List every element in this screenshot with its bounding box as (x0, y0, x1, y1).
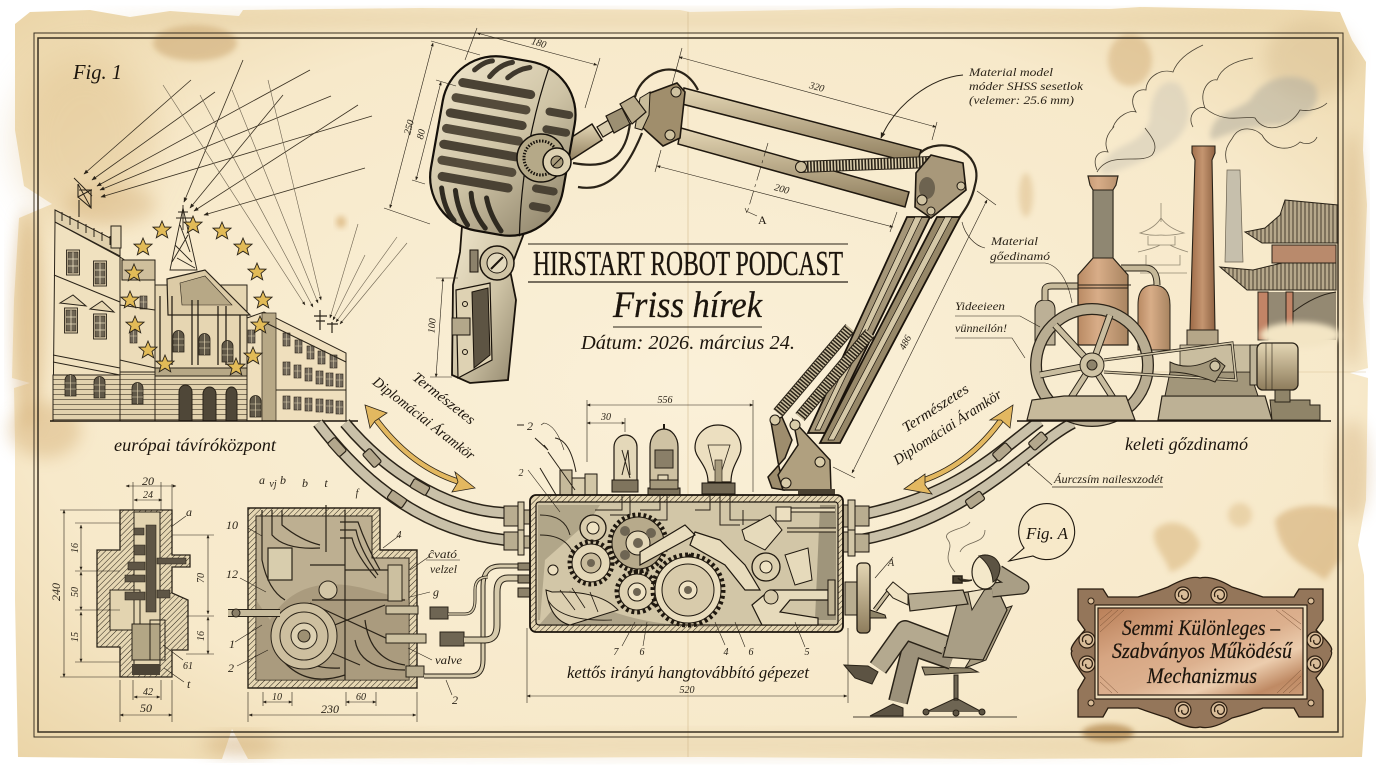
cutaway labels: 2 (228, 661, 234, 675)
dimensions: microphone and arm: 320 (807, 80, 825, 95)
connecting rods (1104, 343, 1236, 382)
dimensions: microphone and arm: 180 (530, 36, 547, 51)
cross-section drawing: left (49, 474, 214, 722)
smoke outlines (1095, 45, 1327, 172)
section labels (49, 474, 207, 715)
right gear and escapement (742, 507, 836, 585)
smoke masses (1100, 77, 1317, 175)
housing interior (536, 502, 838, 625)
title rule top (528, 243, 848, 245)
dimensions: microphone and arm: 250 (402, 119, 417, 136)
title rule bottom (528, 281, 848, 283)
gearbox dimensions and labels: 2 (518, 468, 524, 479)
right antennas (314, 310, 338, 333)
piston linkage (752, 580, 835, 625)
second bay (120, 257, 155, 421)
plate corner engraving (1100, 610, 1301, 693)
head (972, 555, 1000, 589)
caption: eastern dynamo: keleti gőzdinamó (1125, 434, 1248, 454)
annotation: left engine notes: Yideeieen (955, 299, 1005, 313)
flywheel bed (1027, 396, 1135, 420)
annotation: material dynamo: gőedinamó (990, 249, 1050, 263)
gearbox dimensions and labels (517, 395, 848, 703)
handwheel and lever: A (887, 558, 895, 569)
mic joint cylinder (558, 96, 646, 162)
section labels: t (187, 677, 191, 691)
engine bed (1158, 345, 1320, 420)
mic pivot knuckle (517, 134, 571, 182)
electric motor (1250, 343, 1298, 402)
small left tank (1035, 286, 1080, 345)
cam lever (640, 525, 760, 590)
tall chimney (1187, 146, 1218, 350)
cutaway labels: f (356, 488, 360, 499)
robot arm (558, 70, 976, 496)
dimensions: microphone and arm: 100 (426, 318, 439, 334)
cutaway labels: b (302, 476, 308, 490)
block shell (248, 508, 417, 688)
pipe (953, 576, 972, 583)
block interior (256, 516, 409, 680)
lower arm springs (778, 328, 870, 417)
cutaway drawing: valve block (226, 473, 518, 722)
cutaway labels: 12 (226, 567, 238, 581)
section labels: 240 (49, 583, 63, 601)
gold double arrow: right (904, 405, 1013, 494)
gear: large (653, 555, 723, 625)
section labels: 50 (70, 587, 81, 597)
dimensions: microphone and arm: 200 (773, 182, 790, 197)
european stars (121, 216, 272, 375)
gearbox mechanism (530, 424, 843, 632)
signal beams converging on antennas (84, 60, 407, 324)
temple (1220, 200, 1340, 348)
left antenna (74, 178, 92, 217)
subtitle rule (613, 326, 762, 328)
section body (97, 510, 190, 677)
dimensions: microphone and arm: 486 (897, 334, 914, 352)
copper plate (1098, 608, 1303, 695)
cutaway labels: b (280, 473, 286, 487)
housing (530, 495, 843, 632)
cutaway labels: 4 (396, 530, 402, 541)
annotation: material model: (velemer: 25.6 mm) (969, 93, 1074, 107)
steam and background factory (1095, 45, 1327, 273)
annotation: left engine notes: vünneilón! (955, 321, 1007, 335)
ground line (1017, 420, 1331, 422)
vacuum tube small (612, 435, 638, 492)
section labels: a (186, 505, 192, 519)
elbow joint (915, 155, 966, 218)
rear tank (1121, 268, 1170, 350)
microphone (422, 48, 584, 383)
circuit label: right: Természetes (900, 381, 972, 436)
caption: duplex sound mechanism: kettős irányú hangtovábbító gépezet (567, 663, 810, 682)
input shaft (228, 609, 280, 617)
cutaway labels: ĉvató (428, 547, 457, 561)
pipes: right coupling (860, 421, 1073, 540)
cutaway labels: 10 (272, 692, 282, 703)
cutaway labels: 60 (356, 692, 366, 703)
annotation: material dynamo: Material (990, 234, 1039, 248)
upper bar (682, 88, 921, 164)
gear: lower centre (617, 572, 657, 612)
subtitle: Friss hírek (612, 285, 763, 326)
interior shadow (538, 505, 836, 627)
rotor (271, 581, 337, 669)
background pagoda (1138, 203, 1188, 273)
ornate copper plaque (1071, 577, 1332, 728)
plaque text: Szabványos Működésű (1112, 638, 1293, 663)
cutaway labels: a (259, 473, 265, 487)
temple upper floor (1272, 245, 1336, 263)
gearbox dimensions and labels: 4 (724, 647, 728, 658)
cutaway labels: vj (269, 479, 277, 490)
gearbox dimensions and labels: 30 (600, 412, 611, 423)
reclining man with pipe (844, 522, 1022, 717)
plaque text (1112, 615, 1293, 688)
speech bubble: Fig. A (1009, 504, 1075, 561)
cutaway labels: 230 (321, 702, 339, 716)
pipes: left coupling (318, 423, 505, 540)
mic neck and handle (452, 226, 526, 383)
raised arm (992, 572, 1022, 590)
gear: upper centre (610, 515, 666, 571)
gearbox dimensions and labels: 6 (640, 647, 644, 658)
handwheel and lever (845, 557, 895, 633)
annotation: cable note: Áurczsím nailesxzodét (1053, 472, 1164, 486)
arm base bracket (768, 415, 835, 496)
connectors: left of gearbox (504, 502, 530, 597)
temple upper roof (1245, 200, 1338, 243)
back leg (898, 646, 952, 702)
lower arm bars (808, 217, 960, 443)
pipe smoke (946, 522, 985, 572)
left wing (53, 210, 121, 421)
cutaway dimensions (235, 528, 452, 722)
circuit label: right: Diplomáciai Áramkör (889, 386, 1005, 469)
hand (886, 582, 908, 605)
annotation: cable note (1027, 463, 1164, 487)
gearbox dimensions and labels: 5 (804, 647, 810, 658)
temple lower roof (1220, 263, 1336, 290)
floor shadow (853, 716, 1017, 718)
section labels: 61 (183, 661, 193, 672)
gold double arrow: left (365, 405, 475, 492)
gearbox dimensions and labels: 2 (527, 419, 533, 433)
speech bubble: Fig. A: Fig. A (1025, 524, 1069, 543)
cutaway labels: 10 (226, 518, 238, 532)
section labels: 50 (140, 701, 152, 715)
gear: small top idler (580, 515, 606, 541)
light bulb (695, 425, 741, 494)
shirt and tie (968, 589, 985, 610)
ground line (50, 420, 358, 422)
solenoid (268, 548, 292, 580)
office chair (922, 606, 1012, 716)
vacuum tube large (648, 424, 680, 496)
cutaway labels: 1 (229, 637, 235, 651)
annotation: material model: Material model (968, 65, 1054, 79)
gearbox dimensions and labels: 556 (658, 395, 672, 406)
mic head (422, 48, 584, 244)
section labels: 70 (196, 573, 207, 583)
front leg (878, 630, 945, 668)
pale distant chimney (1225, 170, 1243, 262)
dimensions: microphone and arm: A (758, 213, 767, 227)
main title: HIRSTART ROBOT PODCAST (533, 244, 843, 283)
central portico (155, 270, 250, 421)
corner rosettes (1088, 598, 1314, 706)
frame silhouette (1071, 577, 1332, 728)
plaque text: Mechanizmus (1146, 663, 1257, 688)
lower bar (678, 128, 909, 207)
temple hall (1258, 292, 1336, 340)
circuit label: left: Diplomáciai Áramkör (369, 373, 479, 464)
wiring (262, 505, 405, 680)
front shoe (844, 665, 878, 684)
dimensions: microphone and arm: 80 (415, 128, 428, 141)
front arm (908, 590, 968, 611)
building: european telegraph centre (50, 178, 358, 421)
section labels: 16 (196, 631, 207, 641)
boiler (1078, 176, 1131, 345)
pipes to gearbox (424, 566, 518, 676)
top fittings (535, 438, 597, 505)
cutaway labels (226, 473, 463, 716)
plumbing traces (540, 495, 760, 560)
central lattice antenna (170, 205, 197, 270)
wires (573, 70, 976, 218)
title block (528, 244, 848, 354)
cutaway labels: g (433, 585, 439, 599)
gearbox dimensions and labels: 7 (614, 647, 620, 658)
annotation: material model: móder SHSS sesetlok (969, 79, 1084, 93)
cutaway labels: velzel (430, 562, 458, 576)
section dimensions (60, 482, 214, 722)
inner shading (256, 584, 409, 680)
frame scrolls (1079, 587, 1323, 718)
section labels: 24 (143, 490, 153, 501)
dimensions: microphone and arm (384, 28, 996, 478)
right wing (247, 312, 346, 421)
torso (943, 588, 1007, 660)
flywheel (1036, 309, 1148, 421)
annotation: left engine notes (955, 299, 1040, 358)
annotation: material dynamo (962, 222, 1072, 303)
section labels: 20 (142, 474, 154, 488)
cutaway labels: 2 (452, 693, 458, 707)
section labels: 42 (143, 687, 153, 698)
date: Dátum: 2026. március 24. (580, 332, 795, 354)
figure label: Fig. 1: Fig. 1 (72, 60, 122, 84)
plaque text: Semmi Különleges – (1122, 615, 1281, 640)
annotation: material model (881, 65, 1084, 138)
cutaway labels: t (324, 476, 328, 490)
gearbox dimensions and labels: 520 (680, 685, 694, 696)
upper spring (796, 156, 937, 172)
shoulder plate (635, 83, 685, 146)
cutaway labels: valve (435, 653, 463, 667)
section labels: 16 (70, 543, 81, 553)
gearbox dimensions and labels: 6 (748, 647, 754, 658)
quadrant arm (546, 565, 618, 625)
temple base haze (1260, 322, 1340, 348)
steam engine (1017, 146, 1331, 421)
section labels: 15 (70, 632, 81, 642)
connectors: right of gearbox (843, 500, 869, 556)
circuit label: left: Természetes (409, 369, 478, 428)
output ports (386, 565, 464, 677)
frame inner band (1095, 605, 1307, 699)
gear: left (570, 542, 612, 584)
caption: european centre: európai távíróközpont (114, 435, 277, 455)
back shoe (870, 704, 903, 716)
